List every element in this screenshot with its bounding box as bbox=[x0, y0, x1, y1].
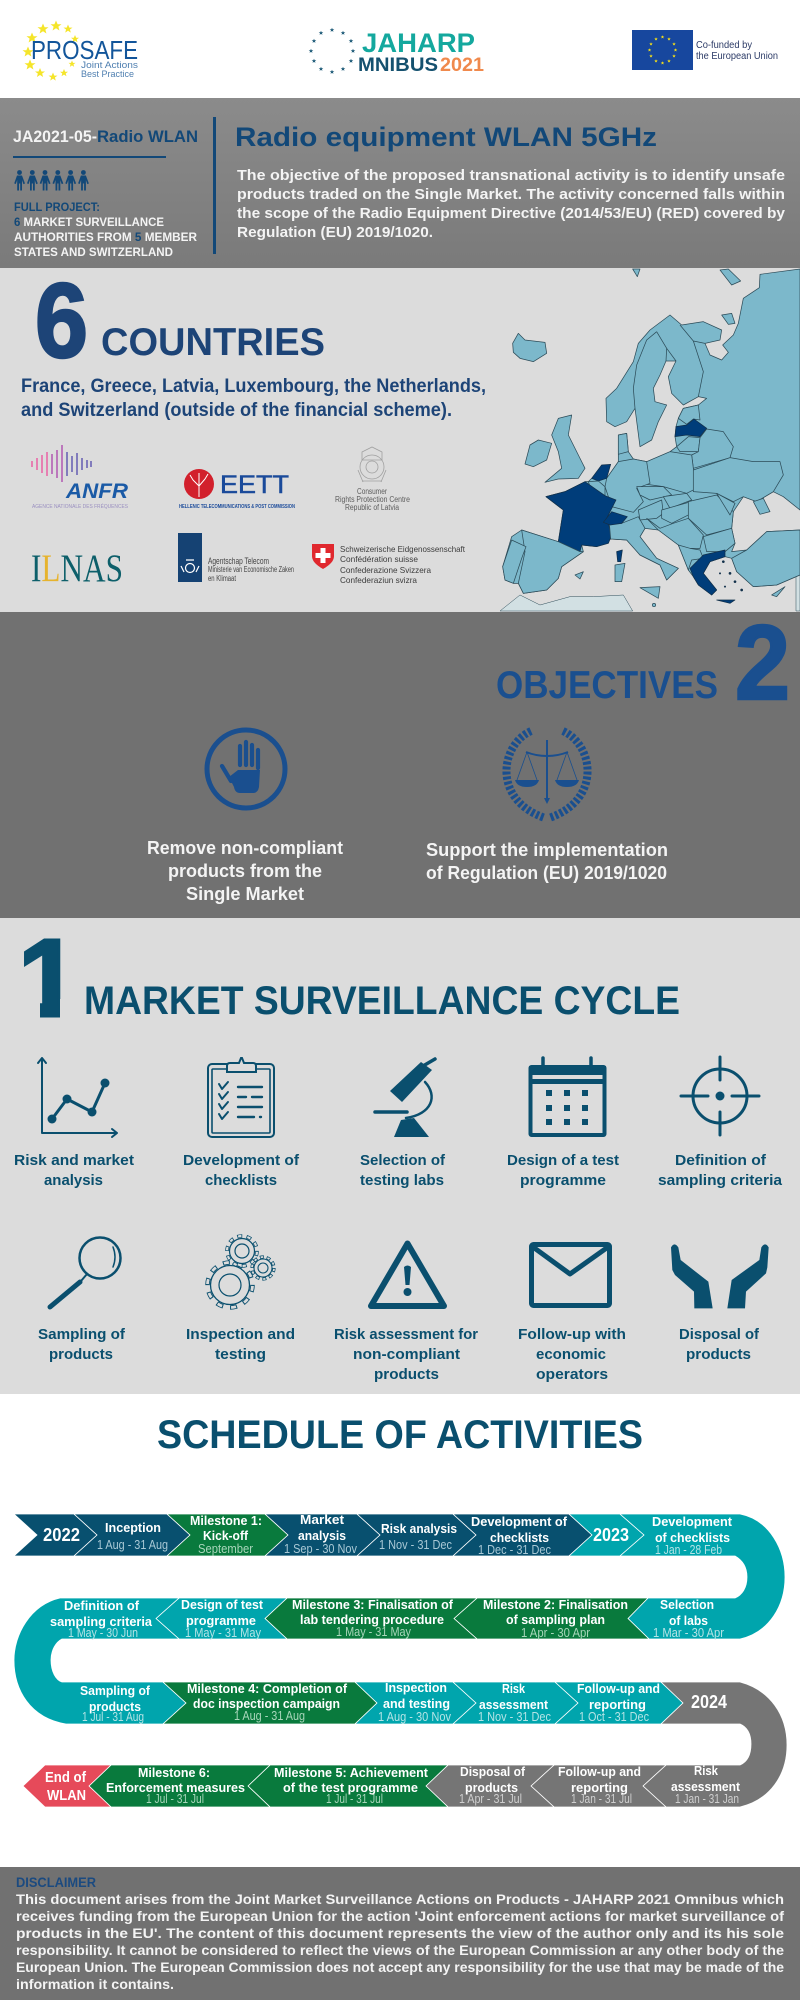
project scope text bbox=[14, 200, 197, 259]
label: Risk and market bbox=[14, 1152, 134, 1169]
step: risk assessment 2023: assessment bbox=[479, 1697, 549, 1712]
milestone 6: 1 Jul - 31 Jul bbox=[146, 1792, 204, 1806]
milestone 5: of the test programme bbox=[283, 1780, 418, 1795]
logo: co-funded by the European Union: Co-funded by bbox=[696, 40, 752, 51]
label: sampling criteria bbox=[658, 1172, 783, 1189]
icon: target crosshair bbox=[681, 1057, 759, 1135]
panel: objectives bbox=[0, 604, 800, 918]
label: Definition of bbox=[675, 1152, 767, 1169]
disclaimer text: responsibility. It cannot be considered to reflect the views of the European Commission ar any other body of the bbox=[16, 1943, 785, 1958]
logo: ANFR: ANFR bbox=[65, 480, 129, 503]
project scope text: FULL PROJECT: bbox=[14, 200, 100, 214]
panel: project header bbox=[0, 98, 800, 268]
step: follow-up and reporting 2024: reporting bbox=[571, 1780, 628, 1795]
label: Selection of bbox=[360, 1152, 446, 1169]
logo: EETT: HELLENIC TELECOMMUNICATIONS & POST COMMISSION bbox=[179, 504, 295, 510]
heading: countries: COUNTRIES bbox=[101, 321, 325, 364]
logo: Agentschap Telecom bbox=[178, 533, 294, 583]
disclaimer text: This document arises from the Joint Market Surveillance Actions on Products - JAHARP 2021 Omnibus which bbox=[16, 1892, 784, 1907]
step: disposal of products bbox=[426, 1764, 554, 1807]
label bbox=[507, 1152, 619, 1189]
project code bbox=[13, 127, 198, 146]
logo: JAHARP Omnibus 2021: 2021 bbox=[440, 55, 484, 76]
milestone 2: Milestone 2: Finalisation bbox=[483, 1597, 628, 1612]
objective one text: Remove non-compliant bbox=[147, 838, 343, 858]
label: testing labs bbox=[360, 1172, 444, 1189]
milestone 6 bbox=[89, 1765, 270, 1807]
label bbox=[679, 1326, 760, 1363]
step: inspection and testing: 1 Aug - 30 Nov bbox=[378, 1710, 452, 1724]
label bbox=[360, 1152, 446, 1189]
icon: envelope bbox=[532, 1244, 610, 1306]
milestone 4: doc inspection campaign bbox=[193, 1696, 340, 1711]
step: risk analysis: Risk analysis bbox=[381, 1521, 457, 1536]
step: inspection and testing bbox=[355, 1680, 476, 1724]
step: follow-up and reporting 2023: Follow-up and bbox=[577, 1681, 660, 1696]
step: disposal of products: products bbox=[465, 1780, 518, 1795]
logo: Swiss Confederation: Schweizerische Eidgenossenschaft bbox=[340, 544, 466, 554]
intro paragraph: products traded on the Single Market. The activity concerned falls within bbox=[237, 187, 785, 203]
end of WLAN: End of bbox=[45, 1769, 87, 1786]
label: Inspection and bbox=[186, 1326, 295, 1343]
step: follow-up and reporting 2024: Follow-up and bbox=[558, 1764, 641, 1779]
label: Development of bbox=[183, 1152, 300, 1169]
milestone 1: September bbox=[198, 1542, 253, 1556]
step: development of checklists 2022: 1 Dec - 31 Dec bbox=[478, 1543, 551, 1557]
label bbox=[183, 1152, 300, 1189]
intro paragraph: The objective of the proposed transnational activity is to identify unsafe bbox=[237, 168, 785, 184]
label: checklists bbox=[205, 1172, 277, 1189]
country list bbox=[21, 376, 486, 421]
step: development of checklists 2022: checklists bbox=[490, 1530, 549, 1545]
chart: schedule ribbon bbox=[14, 1512, 787, 1807]
grey curve: 2024 and risk assessment: Risk bbox=[694, 1763, 719, 1778]
end of WLAN bbox=[23, 1765, 111, 1807]
step: inspection and testing: Inspection bbox=[385, 1680, 447, 1695]
logo: Swiss Confederation bbox=[312, 544, 466, 585]
milestone 5: 1 Jul - 31 Jul bbox=[326, 1792, 383, 1806]
label: Design of a test bbox=[507, 1152, 619, 1169]
logo: co-funded by the European Union bbox=[632, 30, 778, 70]
teal curve: definition of sampling criteria and sampling of products bbox=[14, 1598, 186, 1724]
row 1: 2022 bbox=[14, 1514, 97, 1556]
panel: market surveillance cycle bbox=[0, 917, 800, 1394]
panel: six countries bbox=[0, 262, 800, 612]
disclaimer text: European Union. The European Commission does not accept any responsibility for the use that may be made of the bbox=[16, 1960, 784, 1975]
step: disposal of products: 1 Apr - 31 Jul bbox=[459, 1792, 522, 1806]
map of Europe bbox=[500, 269, 800, 611]
teal curve: development of checklists and selection of labs bbox=[620, 1514, 785, 1640]
disclaimer text bbox=[16, 1892, 785, 1992]
teal curve: definition of sampling criteria and sampling of products: 1 May - 30 Jun bbox=[68, 1626, 138, 1640]
grey curve: 2024 and risk assessment: 1 Jan - 31 Jan bbox=[675, 1792, 739, 1806]
label bbox=[518, 1326, 626, 1383]
logo: PROSAFE: Joint Actions bbox=[81, 60, 138, 71]
logo: Consumer Rights Protection Centre Latvia: Consumer bbox=[357, 487, 387, 496]
step: market analysis: analysis bbox=[298, 1528, 346, 1543]
step: design of test programme: Design of test bbox=[181, 1597, 264, 1612]
teal curve: definition of sampling criteria and sampling of products: Sampling of bbox=[80, 1683, 151, 1698]
step: disposal of products: Disposal of bbox=[460, 1764, 526, 1779]
heading: Radio equipment WLAN 5GHz bbox=[235, 122, 657, 152]
icon: stop hand bbox=[207, 730, 285, 808]
end of WLAN: WLAN bbox=[47, 1787, 86, 1804]
logo: Consumer Rights Protection Centre Latvia bbox=[335, 447, 410, 512]
milestone 1 bbox=[167, 1513, 288, 1556]
intro paragraph bbox=[237, 168, 785, 241]
logo: PROSAFE: Best Practice bbox=[81, 69, 134, 80]
logo: JAHARP Omnibus 2021 bbox=[309, 28, 484, 76]
label: economic bbox=[536, 1346, 606, 1363]
milestone 1: Kick-off bbox=[203, 1528, 249, 1543]
grey curve: 2024 and risk assessment: 2024 bbox=[691, 1692, 727, 1712]
heading: schedule of activities: SCHEDULE OF ACTIVITIES bbox=[157, 1413, 643, 1457]
step: follow-up and reporting 2023: 1 Oct - 31 Dec bbox=[579, 1710, 649, 1724]
label bbox=[14, 1152, 134, 1189]
year 2023 bbox=[569, 1514, 644, 1556]
label bbox=[186, 1326, 295, 1363]
icon: scales of justice in wreath bbox=[506, 731, 588, 818]
label: products bbox=[686, 1346, 751, 1363]
teal curve: development of checklists and selection of labs: 1 Mar - 30 Apr bbox=[653, 1626, 724, 1640]
step: inception: 1 Aug - 31 Aug bbox=[97, 1538, 168, 1552]
step: follow-up and reporting 2023 bbox=[555, 1681, 683, 1724]
disclaimer heading: DISCLAIMER bbox=[16, 1875, 96, 1890]
milestone 3 bbox=[265, 1597, 477, 1639]
icon: magnifying glass bbox=[50, 1238, 120, 1307]
step: risk assessment 2023: 1 Nov - 31 Dec bbox=[478, 1710, 551, 1724]
step: risk assessment 2023: Risk bbox=[502, 1681, 526, 1696]
objective one text bbox=[147, 838, 343, 904]
logo: Swiss Confederation: Confédération suisse bbox=[340, 554, 418, 564]
project scope text: AUTHORITIES FROM 5 MEMBER bbox=[14, 230, 197, 244]
step: market analysis bbox=[265, 1512, 380, 1556]
teal curve: development of checklists and selection of labs: Development bbox=[652, 1514, 733, 1529]
label: Risk assessment for bbox=[334, 1326, 478, 1343]
disclaimer text: information it contains. bbox=[16, 1977, 174, 1992]
icon: chart bbox=[38, 1058, 117, 1137]
teal curve: definition of sampling criteria and sampling of products: sampling criteria bbox=[50, 1614, 153, 1629]
logo: ANFR bbox=[32, 445, 129, 510]
label: Sampling of bbox=[38, 1326, 126, 1343]
step: design of test programme: programme bbox=[186, 1613, 256, 1628]
country list: France, Greece, Latvia, Luxembourg, the Netherlands, bbox=[21, 376, 486, 397]
milestone 3: Milestone 3: Finalisation of bbox=[292, 1597, 454, 1612]
icon: calendar bbox=[529, 1058, 606, 1135]
year 2023: 2023 bbox=[593, 1525, 629, 1545]
objective two text: of Regulation (EU) 2019/1020 bbox=[426, 863, 667, 883]
label bbox=[38, 1326, 126, 1363]
logo: EETT bbox=[179, 469, 295, 510]
milestone 2: of sampling plan bbox=[506, 1612, 605, 1627]
milestone 6: Enforcement measures bbox=[106, 1780, 245, 1795]
project scope text: 6 MARKET SURVEILLANCE bbox=[14, 215, 164, 229]
objective one text: products from the bbox=[168, 861, 322, 881]
milestone 4: Milestone 4: Completion of bbox=[187, 1681, 348, 1696]
step: development of checklists 2022: Development of bbox=[471, 1514, 568, 1529]
milestone 5: Milestone 5: Achievement bbox=[274, 1765, 429, 1780]
teal curve: definition of sampling criteria and sampling of products: products bbox=[89, 1699, 141, 1714]
label: products bbox=[374, 1366, 439, 1383]
logo: Agentschap Telecom: en Klimaat bbox=[208, 574, 237, 583]
label: analysis bbox=[44, 1172, 103, 1189]
heading: objectives: OBJECTIVES bbox=[496, 664, 718, 707]
step: risk analysis: 1 Nov - 31 Dec bbox=[379, 1538, 452, 1552]
logo: Consumer Rights Protection Centre Latvia: Rights Protection Centre bbox=[335, 495, 410, 504]
intro paragraph: the scope of the Radio Equipment Directive (2014/53/EU) (RED) covered by bbox=[237, 206, 785, 222]
teal curve: definition of sampling criteria and sampling of products: 1 Jul - 31 Aug bbox=[82, 1710, 144, 1724]
logo: ANFR: AGENCE NATIONALE DES FRÉQUENCES bbox=[32, 503, 129, 510]
teal curve: development of checklists and selection of labs: 1 Jan - 28 Feb bbox=[655, 1543, 722, 1557]
step: market analysis: 1 Sep - 30 Nov bbox=[284, 1542, 358, 1556]
big number 2: 2 bbox=[735, 604, 790, 722]
milestone 3: lab tendering procedure bbox=[300, 1612, 444, 1627]
teal curve: definition of sampling criteria and sampling of products: Definition of bbox=[64, 1598, 140, 1613]
milestone 4 bbox=[163, 1681, 377, 1724]
milestone 2: 1 Apr - 30 Apr bbox=[521, 1626, 590, 1640]
step: market analysis: Market bbox=[300, 1512, 345, 1527]
panel: disclaimer bbox=[0, 1867, 800, 2000]
country list: and Switzerland (outside of the financial scheme). bbox=[21, 400, 452, 421]
grey curve: 2024 and risk assessment bbox=[643, 1682, 787, 1807]
step: inception: Inception bbox=[105, 1520, 161, 1535]
step: follow-up and reporting 2024 bbox=[531, 1764, 666, 1807]
label: programme bbox=[520, 1172, 606, 1189]
project scope text: STATES AND SWITZERLAND bbox=[14, 245, 173, 259]
logo: JAHARP Omnibus 2021: MNIBUS bbox=[358, 55, 438, 76]
row 1: 2022: 2022 bbox=[43, 1525, 80, 1545]
milestone 5 bbox=[248, 1765, 448, 1807]
logo: Swiss Confederation: Confederaziun svizra bbox=[340, 575, 417, 585]
big number 6: 6 bbox=[35, 262, 88, 380]
grey curve: 2024 and risk assessment: assessment bbox=[671, 1779, 741, 1794]
project code: Radio WLAN bbox=[97, 127, 198, 146]
step: design of test programme bbox=[156, 1597, 287, 1640]
logo: Agentschap Telecom: Agentschap Telecom bbox=[208, 556, 269, 566]
disclaimer text: receives funding from the European Union for the action 'Joint enforcement actions for market surveillance of bbox=[16, 1909, 785, 1924]
teal curve: development of checklists and selection of labs: of checklists bbox=[655, 1530, 730, 1545]
icon: six people bbox=[14, 170, 89, 190]
icon: gears bbox=[208, 1236, 274, 1308]
label: testing bbox=[215, 1346, 266, 1363]
objective one text: Single Market bbox=[186, 884, 304, 904]
label: Follow-up with bbox=[518, 1326, 626, 1343]
logo: EETT: EETT bbox=[220, 471, 289, 499]
label: non-compliant bbox=[353, 1346, 460, 1363]
step: development of checklists 2022 bbox=[453, 1514, 592, 1557]
label bbox=[658, 1152, 783, 1189]
logo: ILNAS: ILNAS bbox=[31, 547, 123, 590]
intro paragraph: Regulation (EU) 2019/1020. bbox=[237, 225, 433, 241]
objective two text: Support the implementation bbox=[426, 840, 668, 860]
logo: PROSAFE bbox=[22, 20, 138, 81]
label bbox=[334, 1326, 478, 1383]
icon: open hands bbox=[671, 1244, 769, 1308]
step: design of test programme: 1 May - 31 May bbox=[185, 1626, 262, 1640]
label: operators bbox=[536, 1366, 608, 1383]
label: products bbox=[49, 1346, 113, 1363]
milestone 3: 1 May - 31 May bbox=[336, 1625, 412, 1639]
step: inspection and testing: and testing bbox=[383, 1696, 450, 1711]
label: Disposal of bbox=[679, 1326, 760, 1343]
disclaimer text: products in the EU'. The content of this document represents the view of the author only and its his sole bbox=[16, 1926, 785, 1941]
step: inception bbox=[74, 1514, 190, 1556]
milestone 4: 1 Aug - 31 Aug bbox=[234, 1709, 305, 1723]
milestone 1: Milestone 1: bbox=[190, 1513, 262, 1528]
logo: JAHARP Omnibus 2021: JAHARP bbox=[362, 28, 475, 58]
step: risk analysis bbox=[357, 1514, 476, 1556]
teal curve: development of checklists and selection of labs: Selection bbox=[660, 1597, 714, 1612]
logo: PROSAFE: PROSAFE bbox=[31, 35, 138, 65]
icon: clipboard checklist bbox=[208, 1058, 274, 1137]
objective two text bbox=[426, 840, 668, 883]
step: risk assessment 2023 bbox=[453, 1681, 578, 1724]
heading: market surveillance cycle: MARKET SURVEILLANCE CYCLE bbox=[84, 979, 680, 1023]
step: follow-up and reporting 2024: 1 Jan - 31 Jul bbox=[571, 1792, 632, 1806]
teal curve: development of checklists and selection of labs: of labs bbox=[669, 1613, 708, 1628]
logo: Agentschap Telecom: Ministerie van Economische Zaken bbox=[208, 565, 294, 574]
milestone 2 bbox=[454, 1597, 649, 1640]
icon: warning triangle bbox=[371, 1244, 444, 1306]
logo: Consumer Rights Protection Centre Latvia: Republic of Latvia bbox=[345, 503, 399, 512]
icon: microscope bbox=[375, 1059, 435, 1137]
logo: Swiss Confederation: Confederazione Svizzera bbox=[340, 565, 431, 575]
logo: co-funded by the European Union: the European Union bbox=[696, 51, 778, 62]
project code: JA2021-05- bbox=[13, 127, 97, 146]
step: follow-up and reporting 2023: reporting bbox=[589, 1697, 646, 1712]
milestone 6: Milestone 6: bbox=[138, 1765, 210, 1780]
big number 1: 1 bbox=[18, 917, 79, 1040]
